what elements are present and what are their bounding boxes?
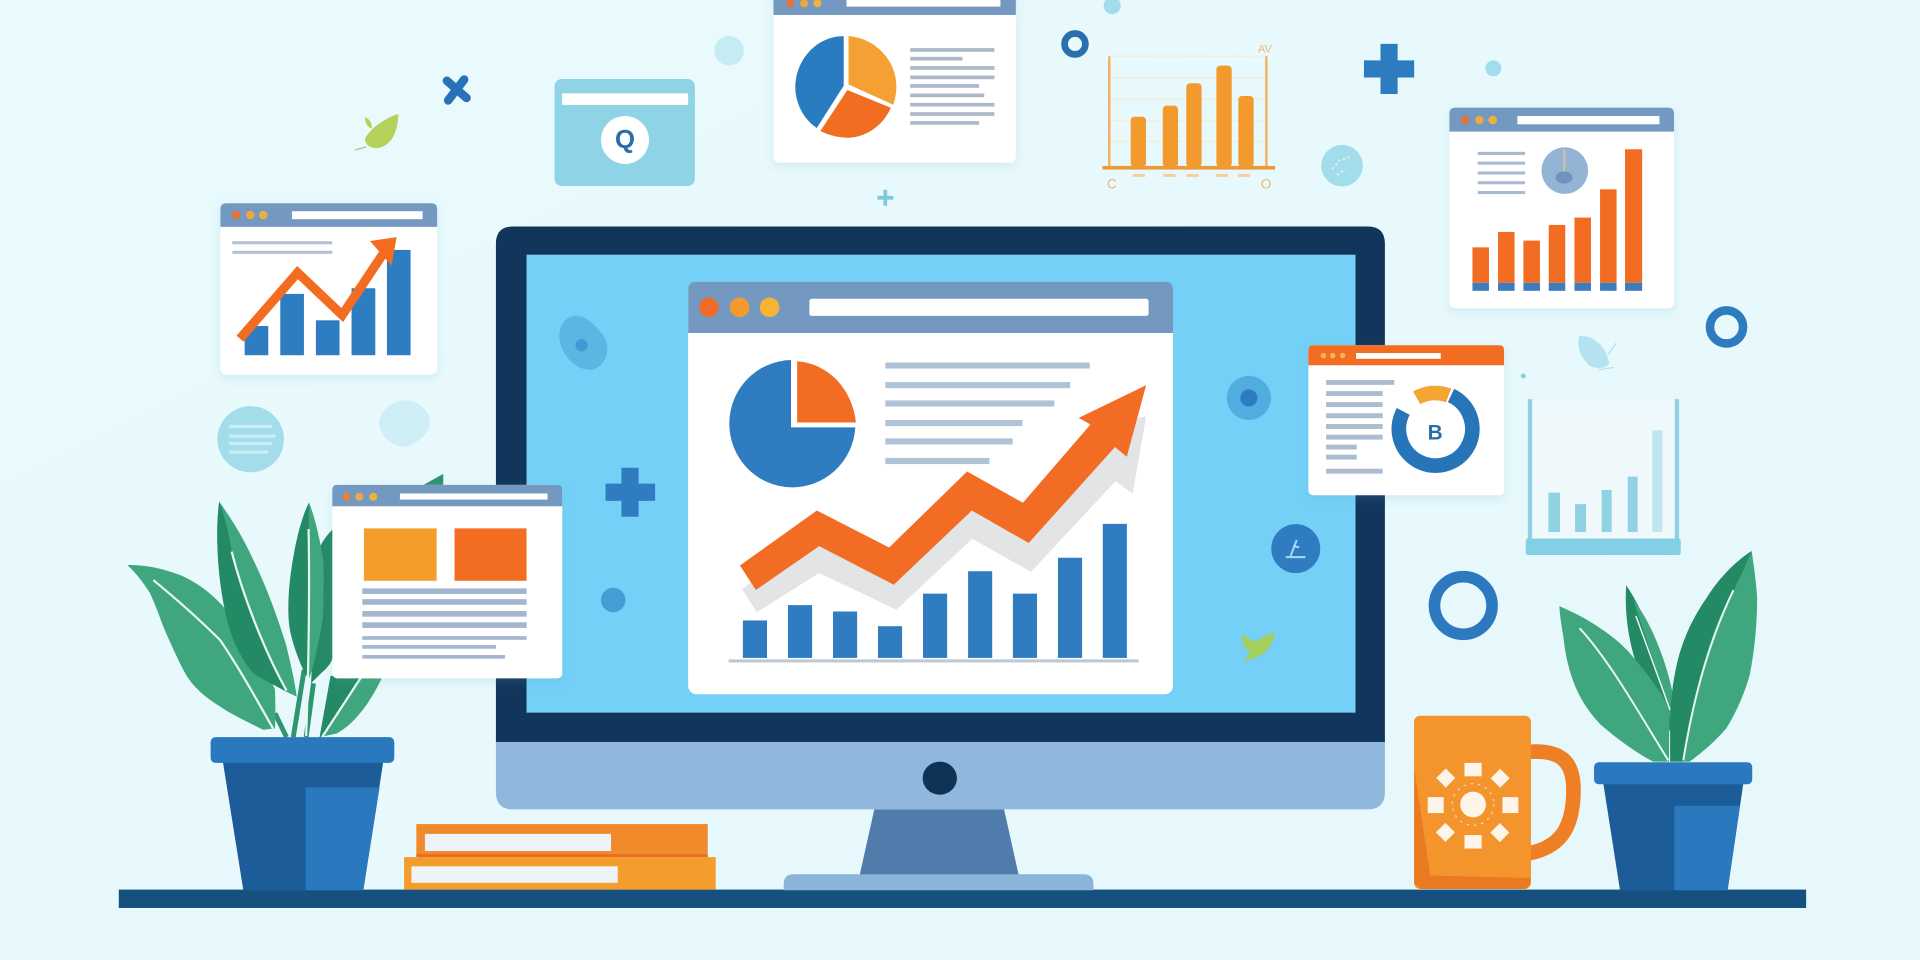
bubble lines [229, 425, 276, 454]
card: pie top [774, 0, 1016, 163]
address bar [562, 93, 688, 105]
address bar [400, 493, 548, 500]
left leaf vein [1580, 628, 1668, 760]
faint blob icon [379, 400, 430, 447]
lime leaf [1242, 632, 1275, 662]
header dots [232, 211, 268, 219]
chart panel [1531, 402, 1676, 539]
card: donut right [1308, 345, 1504, 495]
header dots [342, 493, 377, 501]
left leaf [1559, 606, 1669, 762]
pot body [223, 762, 383, 890]
baseline [1103, 166, 1275, 170]
axes [1109, 56, 1266, 168]
card body [774, 0, 1016, 163]
books [404, 824, 716, 890]
lower right leaf shade [320, 676, 360, 737]
floating background icons [355, 0, 1501, 206]
address bar [1517, 116, 1659, 124]
bars [1131, 66, 1254, 167]
bar chart [743, 524, 1127, 658]
header dots [1321, 353, 1345, 358]
header dots [1461, 116, 1497, 124]
text lines [910, 48, 994, 125]
blue bar bases [1472, 283, 1642, 291]
tick marks [1133, 174, 1250, 177]
axis labels [1107, 44, 1272, 192]
amber square [364, 528, 437, 581]
pie chart [729, 360, 856, 487]
card body [332, 485, 562, 678]
pot rim [1594, 762, 1752, 784]
top ring [1065, 34, 1085, 54]
window body [688, 282, 1173, 694]
monitor bezel [496, 227, 1385, 742]
card body [1449, 108, 1674, 308]
header dots [786, 0, 821, 7]
right leaf shade [1670, 551, 1752, 762]
plus icon [606, 468, 655, 517]
orange square [455, 528, 527, 581]
screen decorations [559, 316, 1320, 662]
lime leaf top left [355, 114, 398, 150]
mug shade [1414, 769, 1531, 889]
text lines [885, 362, 1090, 464]
donut chart [1399, 393, 1472, 466]
lower right leaf [320, 676, 382, 737]
mug handle [1528, 752, 1573, 853]
grid lines [1108, 56, 1266, 141]
badge circle [601, 116, 649, 164]
chart base [1526, 539, 1681, 555]
centre leaf highlight [309, 503, 324, 680]
gauge icon [1542, 147, 1588, 194]
trend arrow [740, 385, 1146, 590]
left pot [211, 737, 394, 890]
lower right leaf vein [322, 677, 361, 737]
back leaf [1626, 585, 1673, 735]
mug body [1414, 716, 1531, 889]
top dot [1104, 0, 1121, 14]
bottom book [404, 857, 716, 890]
bars [245, 250, 411, 355]
card header [1449, 108, 1674, 132]
back leaf highlight [1633, 600, 1673, 730]
far leaf behind card [311, 529, 333, 683]
plant right [1559, 551, 1757, 762]
big plus [1364, 44, 1414, 94]
card: light blue browser icon [555, 79, 695, 186]
badge glyph: Q [615, 126, 635, 154]
target centre [1240, 389, 1257, 407]
trend arrow shadow [742, 416, 1146, 612]
address bar [292, 211, 423, 219]
pot light side [1674, 806, 1740, 890]
ring: large [1434, 577, 1492, 634]
axis labels: AV [1258, 44, 1272, 56]
top book [416, 824, 708, 856]
back leaf tip [421, 474, 443, 486]
monitor base [784, 874, 1093, 890]
chart badge icon [1271, 524, 1320, 573]
address bar [809, 299, 1149, 316]
bottom book pages [411, 866, 618, 883]
stems [275, 670, 313, 737]
blob inner dot [576, 339, 588, 351]
mug emblem [1428, 763, 1518, 849]
address bar [846, 0, 1000, 7]
trend arrow [240, 237, 397, 339]
faint bar chart right [1526, 399, 1681, 555]
pot light side [306, 787, 380, 890]
back leaf vein [1636, 616, 1670, 710]
window dots [699, 298, 779, 317]
card header [1308, 345, 1504, 365]
chart axis [729, 659, 1139, 662]
desk surface [119, 890, 1806, 908]
blue star icon [447, 80, 467, 100]
monitor stand [860, 809, 1019, 876]
centre vein [306, 529, 309, 736]
axis labels: C [1107, 177, 1117, 192]
speech bubble [217, 406, 284, 472]
network marks [1332, 157, 1351, 175]
small dot right [1485, 60, 1501, 76]
text lines [362, 588, 527, 659]
tall leaf [217, 502, 297, 697]
bars [1548, 430, 1662, 532]
tiny sparkle [1521, 373, 1526, 378]
pot rim [211, 737, 394, 763]
camera dot [923, 762, 957, 795]
main browser window [688, 282, 1173, 694]
target icon [1227, 376, 1271, 420]
centre leaf [288, 503, 324, 680]
bubble circle [217, 406, 284, 472]
big left leaf [127, 565, 275, 730]
pale leaf right [1579, 337, 1616, 370]
text lines [1478, 152, 1525, 194]
card body [555, 79, 695, 186]
monitor [496, 227, 1385, 890]
right pot [1594, 762, 1752, 890]
tall leaf shade [217, 502, 287, 692]
card body [220, 203, 437, 375]
card: lower left squares [332, 485, 562, 678]
mug [1414, 716, 1573, 889]
right leaf [1670, 551, 1757, 762]
monitor screen [527, 255, 1356, 713]
text lines [1326, 380, 1394, 474]
card header [774, 0, 1016, 15]
dot [601, 588, 625, 612]
monitor chin [496, 735, 1385, 809]
orange bars [1472, 149, 1642, 283]
card: orange bars right [1449, 108, 1674, 308]
chart badge squiggle [1286, 540, 1305, 557]
donut label: B [1428, 422, 1443, 445]
chart frame [1530, 399, 1677, 539]
bottom book seam [416, 854, 708, 857]
right leaf vein [1683, 590, 1733, 760]
card header [332, 485, 562, 506]
card body [1308, 345, 1504, 495]
address bar [1356, 353, 1441, 359]
big leaf vein [153, 580, 273, 729]
top book pages [425, 834, 611, 851]
card: trend chart top left [220, 203, 437, 375]
tall leaf vein [232, 552, 287, 691]
window header [688, 282, 1173, 333]
orange bar chart top [1103, 44, 1275, 192]
network circle [1321, 145, 1363, 186]
plant left [127, 474, 443, 737]
faint circle [714, 36, 744, 65]
small plus [877, 190, 893, 206]
text lines [232, 241, 332, 254]
pie chart [795, 36, 896, 138]
pot body [1603, 784, 1743, 890]
ring: right [1710, 310, 1743, 343]
card header [220, 203, 437, 227]
axis labels: O [1261, 177, 1271, 192]
blob icon [559, 316, 607, 370]
